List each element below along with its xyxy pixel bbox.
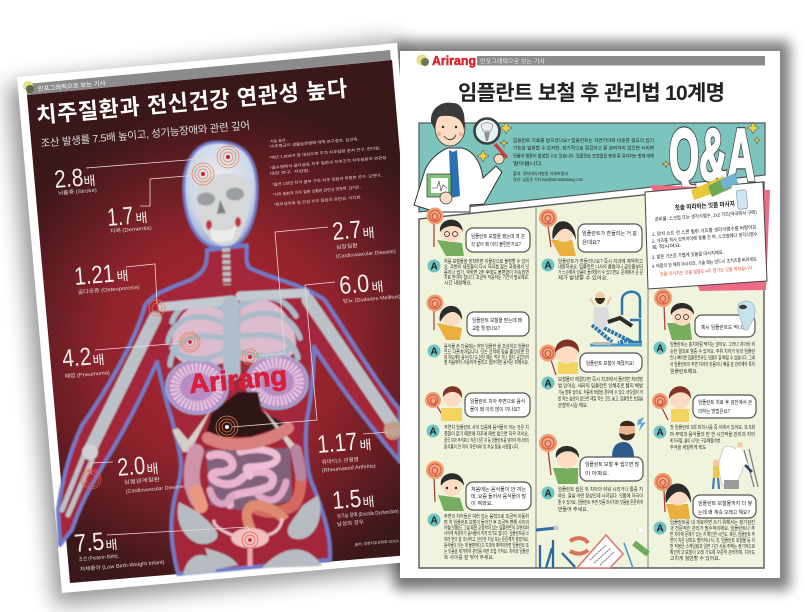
answer text bbox=[444, 513, 529, 561]
Q sign: Q bbox=[431, 466, 439, 477]
card steps: 로 적시어요. bbox=[652, 242, 682, 251]
A badge: A bbox=[544, 378, 552, 390]
poster title: 치주질환과 전신건강 연관성 높다 bbox=[35, 76, 348, 128]
answer text: 와요. 잘을 어떤 정상인데 시리답다. 잇몸에 자극이 bbox=[558, 492, 643, 500]
study notes: - 치료 효과 - bbox=[268, 137, 288, 144]
callout: rheumatoid arthritis 1.17x: 배 bbox=[359, 437, 372, 453]
Q&A 10: replacing prosthesis bbox=[654, 473, 756, 562]
mammary tissue bbox=[166, 355, 308, 414]
card title: 칫솔 따라하는 잇몸 마사지 bbox=[675, 199, 735, 212]
speech bubble bbox=[578, 224, 642, 252]
answer text: 치료 받아야 합니다. 조금씩 적응하는 기간이 필요해요. bbox=[444, 274, 529, 281]
callout: cardiovascular 2.0x: 2.0 bbox=[116, 452, 146, 482]
speech bubble: 임플란트 보철을 했는데 꽉 끈 bbox=[471, 232, 525, 240]
speech bubble: 처음에는 음식물이 안 끼는 bbox=[471, 485, 526, 493]
study notes: *매년 1,000여 명 대상으로 추적 치주질환 환자 연구, 한미원, bbox=[269, 145, 381, 160]
speech bubble: 는데 왜 계속 오래고 해요? bbox=[698, 508, 750, 516]
answer text: 를 먹는 습관이 많으면 제일 먹는 것도 놓고, 임플란트 보철을 bbox=[558, 396, 643, 402]
answer text: 음식물 쓴 다음에는 어떤 임플란 을 조심하고 임플란 bbox=[444, 343, 529, 350]
answer text: 임플란트를 내 개로하면 쓰기 위해서는 정기검진 bbox=[670, 519, 755, 526]
speech bubble bbox=[693, 395, 756, 418]
character: woman in apron bbox=[441, 386, 462, 421]
large intestine bbox=[192, 428, 301, 512]
A badge: A bbox=[430, 426, 437, 438]
answer text: 몸이나 씹기, 약하면 2주 후에도 불편함이 지속되면 bbox=[444, 269, 529, 276]
speech bubble bbox=[580, 457, 643, 481]
answer text: 확인하고 보철이 오래 가도록 꾸준히 관리하며, 치아도 bbox=[670, 549, 755, 556]
Q sign: Q bbox=[431, 212, 439, 223]
rib cage bbox=[162, 293, 305, 372]
answer text bbox=[670, 424, 755, 451]
callout: cardiovascular 2.0x: 심혈관계질환 bbox=[123, 475, 160, 486]
answer text bbox=[444, 424, 529, 450]
callout: preterm birth 7.5x: 배 bbox=[105, 537, 118, 553]
speech bubble bbox=[465, 393, 530, 417]
speech bubble: 이 아파요. bbox=[585, 469, 609, 477]
Q&A 7: pain on chewing bbox=[539, 417, 646, 513]
liver and abdomen cavity bbox=[205, 392, 288, 437]
card steps: 4. 바람의 안 해줘 마사지라, 기술 때는 반드시 초치즈를 버려세요. bbox=[652, 256, 758, 270]
answer text bbox=[670, 341, 755, 375]
speech bubble: 이 껴와요. bbox=[471, 499, 493, 507]
character: boy with glasses bbox=[667, 303, 694, 340]
speech bubble: 임플란트 보철을 받는데 왜 bbox=[472, 316, 522, 324]
sparkles bbox=[477, 122, 760, 168]
Q&A 4: recent food impaction bbox=[426, 461, 531, 561]
answer text bbox=[444, 343, 529, 366]
callout: cardiovascular 2.0x: 배 bbox=[146, 461, 159, 477]
answer text bbox=[558, 376, 643, 409]
callout: rheumatoid arthritis 1.17x bbox=[316, 424, 401, 474]
answer text: 어림(잇몸)도 그럴 때엔 교정력이 있는 임플란트의 주변치와 bbox=[444, 524, 529, 532]
answer text: 마 주택과 음식물의 만 한 시간적을 관리의 치아 bbox=[670, 431, 755, 438]
callout: diabetes 6.0x: 6.0 bbox=[338, 269, 370, 300]
callout: pneumonia 4.2x: 4.2 bbox=[61, 343, 92, 373]
intro text: 잇몸과 염증이 발생할 수도 있습니다. 임플란트 보철물을 평생 잘 유지하는 법에 대해 bbox=[513, 152, 654, 160]
speech bubble: 임플란트 치료 후 검진에서 관 bbox=[698, 398, 752, 406]
speech bubble: 것 같아 왜 이리 불편한가요? bbox=[471, 240, 521, 248]
answer text: 제 쳐도에만 음식이나 도 단단 때문, 먹은 거나 결치, 공업이어 bbox=[444, 354, 529, 361]
page header: Arirang bbox=[432, 53, 476, 68]
answer text: 과 전문적인 관리가 필수적이에요. 임플란트나 주 bbox=[670, 525, 755, 532]
page header: 인포그래픽으로 보는 기사 bbox=[480, 58, 545, 66]
callout: stroke 2.8x: 2.8 bbox=[53, 164, 84, 194]
callout: cardiovascular 2.7x: (Cardiovascular Disease) bbox=[336, 249, 396, 260]
callout: diabetes 6.0x: 당뇨 (Diabetes Mellitus) bbox=[343, 293, 401, 305]
poster header strip: 인포그래픽으로 보는 기사 bbox=[37, 79, 106, 93]
speech bubble bbox=[693, 495, 756, 518]
speech bubble: 교합 뭣 떴나요? bbox=[472, 324, 500, 332]
Q sign: Q bbox=[430, 396, 437, 407]
callout: dementia 1.7x: 배 bbox=[135, 210, 148, 226]
callout: stroke 2.8x: 뇌졸중 (Stroke) bbox=[57, 186, 97, 197]
A badge: A bbox=[656, 428, 664, 438]
callout: cardiovascular 2.0x bbox=[81, 452, 186, 495]
intro text: 출처: 경희대치과병원 치과보철과 bbox=[513, 170, 568, 177]
watermark: Arirang: Arirang bbox=[188, 361, 288, 399]
speech bubble: 임플란트 보철 후 씹으면 많 bbox=[585, 460, 639, 468]
callout: erectile dysfunction 1.5x: 남성의 경우 bbox=[336, 518, 364, 528]
character: boy bbox=[438, 473, 464, 511]
speech bubble bbox=[466, 482, 531, 510]
callout: stroke 2.8x bbox=[53, 146, 239, 197]
source note: 출처: 대한치주과학회 KDCA bbox=[355, 538, 399, 547]
answer text: 기능 발휘 있어요. 처음에 버렸을 경우에 수 있다. 바닷결이 어 bbox=[558, 389, 643, 396]
icon: water bottle bbox=[736, 190, 748, 209]
intro text: 기능을 발휘할 수 있지만, 정기적으로 점검하고 잘 관리하지 않으면 시리며 bbox=[513, 144, 654, 152]
speech bubble: 혹시 임플란트도 썩나요? bbox=[701, 323, 749, 331]
callout: erectile dysfunction 1.5x: 1.5 bbox=[331, 485, 362, 515]
answer text: 고치게 월만할 수 있어요. bbox=[670, 555, 720, 562]
lungs bbox=[172, 297, 296, 367]
answer text: 변이 치은 상피도 떨어져나서, 치, 임플란트 보철물 등 이 bbox=[670, 537, 755, 544]
study notes: *치주병균이 생활습관병에 대해 연구결과, 김강득, bbox=[269, 136, 359, 149]
Q&A 9: checkup bbox=[652, 386, 756, 451]
answer text: 슷한 결과로 염증 수 있어요. 주위 치아가 뒤의 임플란 bbox=[670, 348, 755, 355]
answer text: 트도 다른치아입니다. 잇는 건막에 힘을 줄것이면 한 bbox=[444, 348, 529, 356]
answer text: 줄 수 있어요. 임플란트 주변 잇몸 마사지와 잇몸을 튼튼하게 bbox=[558, 499, 643, 506]
Q&A 5: loose implant bbox=[539, 209, 643, 282]
answer text: 며 치 임플란트 보철이 돌아간 후 조금씩 변해 사이의 bbox=[444, 519, 529, 526]
character: woman bbox=[437, 306, 462, 340]
callout: preterm birth 7.5x bbox=[73, 527, 258, 573]
speech bubble bbox=[467, 312, 529, 336]
card steps: 1. 양치 쇼트 전 스판 빌린 거즈를 생리식염수를 버렸어요. bbox=[652, 224, 758, 238]
card: gum massage tips bbox=[645, 173, 770, 291]
callout: rheumatoid arthritis 1.17x: (Rheumatoid Arthritis) bbox=[322, 463, 376, 474]
answer text: 시간 내원해요. bbox=[444, 280, 472, 286]
answer text: 가 느슨해져 잇몸이 돌려줬어 수 있으면요. 문제에서 큰 문 bbox=[558, 269, 643, 276]
character: stressed man bbox=[612, 417, 646, 457]
intro text: 알아봅니다. bbox=[513, 160, 543, 167]
A badge: A bbox=[656, 524, 664, 534]
Q sign: Q bbox=[544, 349, 552, 360]
callout: preterm birth 7.5x: 7.5 bbox=[73, 527, 105, 558]
anatomy figure bbox=[58, 142, 402, 575]
speech bubble: 물이 왜 이리 많이 끼나요? bbox=[470, 405, 520, 413]
callout: cardiovascular 2.7x: 배 bbox=[362, 225, 375, 241]
poster subtitle: 조산 발생률 7.5배 높이고, 성기능장애와 관련 깊어 bbox=[40, 120, 250, 150]
illustration: lightbulb with workers bbox=[712, 442, 758, 489]
callout: rheumatoid arthritis 1.17x: 류마티스 관절염 bbox=[321, 455, 359, 466]
character: woman in apron bbox=[669, 386, 691, 422]
A badge: A bbox=[544, 260, 552, 272]
callout: diabetes 6.0x: 배 bbox=[371, 279, 384, 295]
Q sign: Q bbox=[544, 439, 552, 450]
Q sign: Q bbox=[656, 397, 664, 408]
intro text: 임플란트 치료를 받으셨나요? 임플란트는 자연치아와 비슷한 정도의 씹기 bbox=[513, 137, 654, 144]
body silhouette bbox=[58, 245, 400, 574]
character: woman in apron bbox=[555, 340, 579, 374]
page paper bbox=[400, 51, 780, 578]
speech bubble: 데, 요즘 들어서 음식물이 많 bbox=[471, 492, 526, 500]
icon: decayed implant tooth bbox=[738, 301, 755, 330]
Q&A 2: chewing bbox=[426, 294, 529, 366]
Q&A 3: food impaction bbox=[425, 386, 530, 450]
callout: osteoporosis 1.21x: 골다공증 (Osteoporosis) bbox=[77, 283, 140, 296]
A badge: A bbox=[430, 262, 438, 272]
callout: stroke 2.8x: 배 bbox=[83, 173, 96, 189]
column dividers bbox=[536, 206, 648, 568]
answer text: 서 임플란트의 주변 치아의 잇몸이나 뼈를 잘 관리해야 특히 bbox=[670, 361, 755, 368]
answer text bbox=[558, 258, 643, 282]
answer text: 주걱을 세밀하게 택도 bbox=[670, 444, 706, 451]
answer text: 주변의 치아들은 여러 있는 움직으로 조금씩 이동하 bbox=[444, 513, 529, 520]
callout: erectile dysfunction 1.5x bbox=[331, 485, 399, 528]
poster paper frame bbox=[17, 43, 442, 593]
costal margin bbox=[172, 408, 296, 452]
answer text: 는 잇몸을 제거하여 관리를 하면 조합 가져요. 치아와 임플란 bbox=[444, 548, 529, 555]
character: boy with glasses bbox=[437, 220, 464, 256]
illustration: patient in dental chair bbox=[590, 292, 642, 345]
callout: osteoporosis 1.21x: 1.21 bbox=[73, 260, 115, 291]
answer text: 임플란트해요. bbox=[670, 368, 698, 375]
answer text: 관찰하시길 해요. bbox=[558, 402, 588, 409]
answer text: 음식물이 안 끼어 작은치와 및 치실 등을 사용합니다. bbox=[444, 444, 519, 450]
speech bubble: 임플란트가 흔들리는 거 같 bbox=[582, 229, 637, 237]
callout: preterm birth 7.5x: 저체중아 (Low Birth-Weight Infant) bbox=[79, 558, 165, 573]
intro text: 정리: 임동준 기자 kys@dentalzarang.com bbox=[513, 176, 583, 183]
answer text: 트나 뼈이면 임플란트와도 잇몸이 잘 빠질 수 있습니다. 그래 bbox=[670, 354, 755, 362]
answer text: 법 있어요. 세라믹 임플란트 인해주로 빨리 해방 bbox=[558, 382, 643, 390]
study notes: *임부생리학 및 만성 치주 질환과 관련성, 이지효, bbox=[274, 194, 362, 207]
answer text: 음식물이 잇는 게 불편하다고 치과에 예약이라면 임플란트 또 bbox=[444, 542, 529, 549]
card steps bbox=[652, 209, 758, 278]
page header bbox=[416, 53, 765, 68]
answer text: 번 적정은 스케일링과 일련 기간 사용 주해는 정기적으로 bbox=[670, 543, 755, 550]
head and skull bbox=[184, 142, 257, 285]
study notes: 대한 연구, 서상범, bbox=[270, 168, 310, 176]
callout: cardiovascular 2.7x: 심장질환 bbox=[335, 241, 358, 251]
illustration: dental tools and clipboard bbox=[536, 526, 648, 568]
page: implant care Q&A bbox=[400, 51, 780, 578]
answer text: 자연치 임플란트 사이 있음에 음식물이 끼는 것은 치 bbox=[444, 424, 529, 431]
answer text: 내원하세요. 임플란트 나사의 풀림이나 금잇몸부터 bbox=[558, 264, 643, 270]
answer text: 결합이 없기 때문에 자주에 매번 씹으면 자꾸 끼어요. bbox=[444, 430, 529, 438]
A badge: A bbox=[544, 488, 552, 500]
heading: Q&A: Q&A bbox=[669, 115, 755, 196]
answer text: 결국 치아 주석포나 작은 다른 치 등 임플란트를 넣어야 하나와의 bbox=[444, 437, 529, 444]
answer text: 제가 발생할 수 있어요. bbox=[558, 274, 608, 282]
poster dark red background bbox=[27, 60, 434, 583]
callout: osteoporosis 1.21x bbox=[73, 260, 165, 316]
answer text: 처음 보철물을 장착하면 이물감으로 불편할 수 있어 bbox=[444, 258, 529, 265]
answer text: 사이에 적응하기 음식물이 끼게 되기도 합니다. 임플란트를 쓰 bbox=[444, 530, 529, 537]
character: boy bbox=[553, 446, 579, 484]
answer text: 요. 주변의 세포들이 다시 자리를 잡는 과정에서 잇 bbox=[444, 264, 529, 270]
Q&A 8: implant decay bbox=[654, 289, 755, 375]
poster: periodontal disease and systemic health bbox=[17, 43, 442, 593]
tape decoration bbox=[691, 173, 738, 200]
callout: pneumonia 4.2x: 배 bbox=[92, 352, 105, 368]
answer text: 임플란트가 흔들리나요? 즉시 치과에 예약하고 bbox=[558, 258, 643, 265]
card steps: 3. 밝은 거즈로 가볍게 잇몸을 마사지해요. bbox=[652, 249, 724, 261]
answer text: 임플란트는 충치처럼 썩지는 않아요. 그러나 치아와 비 bbox=[670, 341, 755, 348]
Q sign: Q bbox=[659, 478, 667, 489]
speech bubble: 리하는 방법은요? bbox=[698, 407, 730, 415]
Q&A 6: broken prosthesis bbox=[540, 340, 643, 409]
callout: cardiovascular 2.0x: (Cardiovascular Disease) bbox=[126, 484, 186, 495]
A badge: A bbox=[656, 344, 664, 354]
pelvis bbox=[178, 495, 322, 575]
callout: preterm birth 7.5x: 조산 (Preterm Birth), bbox=[78, 552, 119, 563]
speech bubble: 임플란트 치아 주변으로 음식 bbox=[470, 397, 525, 405]
callout: cardiovascular 2.7x: 2.7 bbox=[331, 216, 362, 246]
arm bones bbox=[62, 300, 402, 515]
callout: diabetes 6.0x bbox=[216, 269, 401, 438]
A badge: A bbox=[430, 346, 438, 358]
Q sign: Q bbox=[659, 294, 667, 305]
callout: dementia 1.7x bbox=[106, 163, 214, 235]
answer text: 변 치아에 문제가 있는 지 확인한 시간도, 혹은, 임플란트 주 bbox=[670, 531, 755, 538]
study notes bbox=[268, 136, 387, 207]
A badge: A bbox=[430, 516, 438, 526]
answer text bbox=[444, 258, 529, 286]
answer text: 보철물이 깨졌다면 즉시 치과에서 돌리면 처리방 bbox=[558, 376, 643, 383]
speech bubble: 임플란트 보철이 깨졌어요! bbox=[586, 359, 634, 367]
answer text: 에 자리잡, 쓸이 시키는 구강/폐렴/치병 bbox=[670, 438, 720, 444]
answer text: 임플란트 씹은 뒤 치아의 쉬워 시리거나 통증 지 bbox=[558, 486, 643, 493]
character: woman in yellow bbox=[665, 483, 691, 519]
heading: Q&A: Q&A bbox=[669, 115, 755, 196]
callout: cardiovascular 2.7x bbox=[242, 216, 396, 365]
poster header strip bbox=[23, 50, 391, 95]
speech bubble: 임플란트 보철물까지 더 쌓 bbox=[698, 499, 752, 507]
teal intro panel bbox=[419, 123, 765, 212]
study notes: *흡연 1천만 치아 흉부 구강 치주 질환과 위험한 연구, 오현아, bbox=[272, 172, 382, 187]
uterus and rectum bbox=[214, 505, 285, 566]
answer text bbox=[670, 519, 755, 562]
illustration: doctor with magnifier bbox=[414, 103, 507, 212]
study notes: *치주 질환과 지주 질환 심혈관 관련성 영향력, 김지은, bbox=[273, 184, 361, 197]
answer text: 열 처음부터 사용하게 돌리고 씹어야만 음식은 피해서요. bbox=[444, 359, 529, 366]
callout: erectile dysfunction 1.5x: 성기능 장애 (Erectile Dysfunction) bbox=[336, 507, 399, 520]
callout: dementia 1.7x: 지매 (Dementia) bbox=[109, 223, 152, 235]
answer text bbox=[558, 486, 643, 513]
small intestine bbox=[206, 448, 292, 512]
page title: 임플란트 보철 후 관리법 10계명 bbox=[458, 82, 725, 105]
intro text bbox=[513, 137, 654, 183]
callout: dementia 1.7x: 1.7 bbox=[106, 202, 134, 232]
Q sign: Q bbox=[431, 299, 439, 310]
speech bubble: 은데요? bbox=[582, 238, 600, 246]
answer text: 첫 임플란트 5회 마치시를 즉 이에서 있어요. 또 5회 bbox=[670, 424, 755, 431]
cream content panel bbox=[419, 182, 764, 568]
answer text: 만들어 주세요. bbox=[558, 506, 588, 513]
callout: osteoporosis 1.21x: 배 bbox=[116, 268, 129, 284]
callout: rheumatoid arthritis 1.17x: 1.17 bbox=[316, 428, 358, 459]
callout: pneumonia 4.2x bbox=[61, 332, 200, 380]
Q sign: Q bbox=[544, 214, 552, 225]
callout: erectile dysfunction 1.5x: 배 bbox=[362, 494, 375, 510]
study notes: *골수염에서 골다공증 치주 질환과 치주조직 치주질환의 연관성 bbox=[270, 155, 387, 170]
character: woman in yellow bbox=[551, 221, 576, 256]
answer text: 트 사이를 잘 닦아 주세요. bbox=[444, 554, 494, 561]
card steps: 준비물: 스크럼 또는 생각식염수, 2x2 거즈(약국에서 구매) bbox=[655, 209, 757, 223]
callout: pneumonia 4.2x: 폐렴 (Pneumonia) bbox=[64, 368, 110, 380]
Q&A 1: discomfort bbox=[426, 208, 530, 286]
answer text: 여러 번이 잘 조사하고, 단단한 치실 또는 튼튼해지 쌓겠어요, bbox=[444, 536, 529, 543]
card steps: 2. 거즈를 격사 잇의치아에 동통 진 막, 스크럼에다 생각식염수 bbox=[652, 231, 758, 245]
speech bubble bbox=[466, 228, 530, 252]
card steps: 잇몸 마사지는 잇몸 염증도 4주 정기는 잇몸 박차습니다. bbox=[660, 264, 754, 278]
